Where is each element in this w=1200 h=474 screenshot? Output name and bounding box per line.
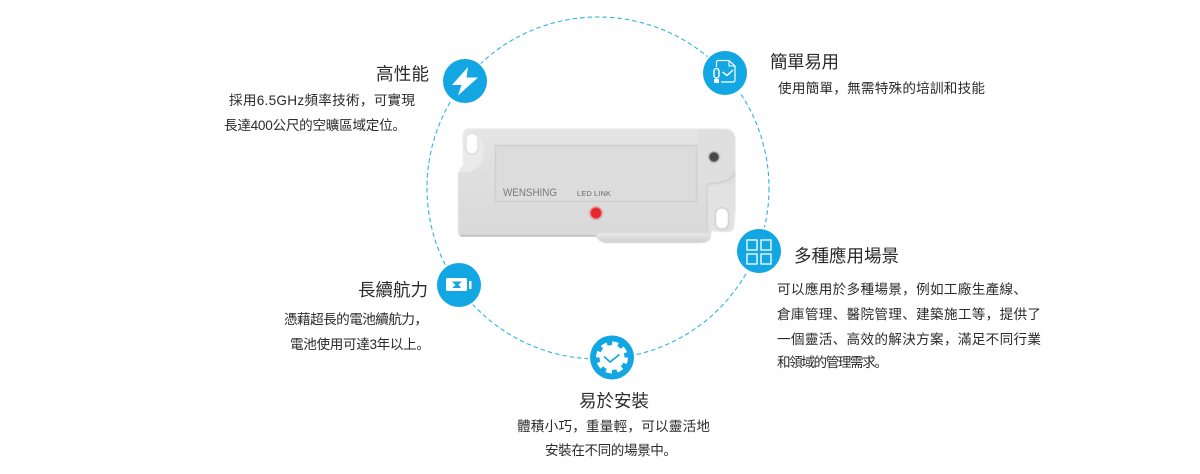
mounting hole top bbox=[466, 133, 478, 154]
crease at tab bbox=[708, 173, 735, 184]
description: long battery life: 電池使用可達3年以上。 bbox=[290, 336, 430, 352]
description: easy to use: 使用簡單，無需特殊的培訓和技能 bbox=[778, 80, 985, 96]
description: high performance: 長達400公尺的空曠區域定位。 bbox=[224, 117, 406, 133]
device shadow edge bbox=[459, 228, 598, 236]
heading: long battery life: 長續航力 bbox=[358, 280, 428, 300]
description: easy installation: 安裝在不同的場景中。 bbox=[545, 443, 677, 458]
heading: easy installation: 易於安裝 bbox=[579, 391, 649, 411]
heading: high performance: 高性能 bbox=[376, 64, 429, 84]
heading: easy to use: 簡單易用 bbox=[770, 52, 839, 72]
feature: long battery life bbox=[284, 261, 483, 352]
device body bbox=[458, 128, 736, 236]
description: high performance: 採用6.5GHz頻率技術，可實現 bbox=[229, 92, 415, 108]
lower right tab bbox=[708, 184, 735, 232]
description: multiple scenarios: 一個靈活、高效的解決方案，滿足不同行業 bbox=[777, 331, 1041, 347]
heading: multiple scenarios: 多種應用場景 bbox=[794, 246, 899, 266]
LED label: LED LINK bbox=[577, 189, 611, 198]
icon: document check bbox=[701, 49, 749, 97]
sensor dot bbox=[708, 152, 720, 162]
icon: battery bbox=[435, 261, 483, 309]
upper right cap bbox=[698, 130, 736, 186]
icon: grid bbox=[735, 227, 783, 275]
description: easy installation: 體積小巧，重量輕，可以靈活地 bbox=[517, 419, 710, 434]
dashed circle bbox=[427, 17, 769, 359]
icon: lightning bolt bbox=[442, 58, 488, 104]
icon: gear check bbox=[588, 334, 636, 382]
mounting hole bottom bbox=[716, 208, 728, 229]
description: long battery life: 憑藉超長的電池續航力， bbox=[284, 312, 428, 327]
feature: high performance bbox=[224, 58, 488, 133]
brand label: WENSHING bbox=[503, 187, 557, 199]
red LED bbox=[590, 206, 602, 220]
description: multiple scenarios: 可以應用於多種場景，例如工廠生產線、 bbox=[777, 281, 1027, 297]
description: multiple scenarios: 和領域的管理需求。 bbox=[777, 354, 888, 370]
feature: easy to use bbox=[701, 49, 985, 97]
description: multiple scenarios: 倉庫管理、醫院管理、建築施工等，提供了 bbox=[777, 306, 1041, 322]
feature: multiple scenarios bbox=[735, 227, 1041, 370]
device photo bbox=[458, 128, 736, 243]
bottom strip bbox=[596, 233, 711, 243]
feature: easy installation bbox=[517, 334, 710, 458]
device label panel bbox=[496, 146, 696, 202]
left ear highlight bbox=[459, 130, 484, 172]
